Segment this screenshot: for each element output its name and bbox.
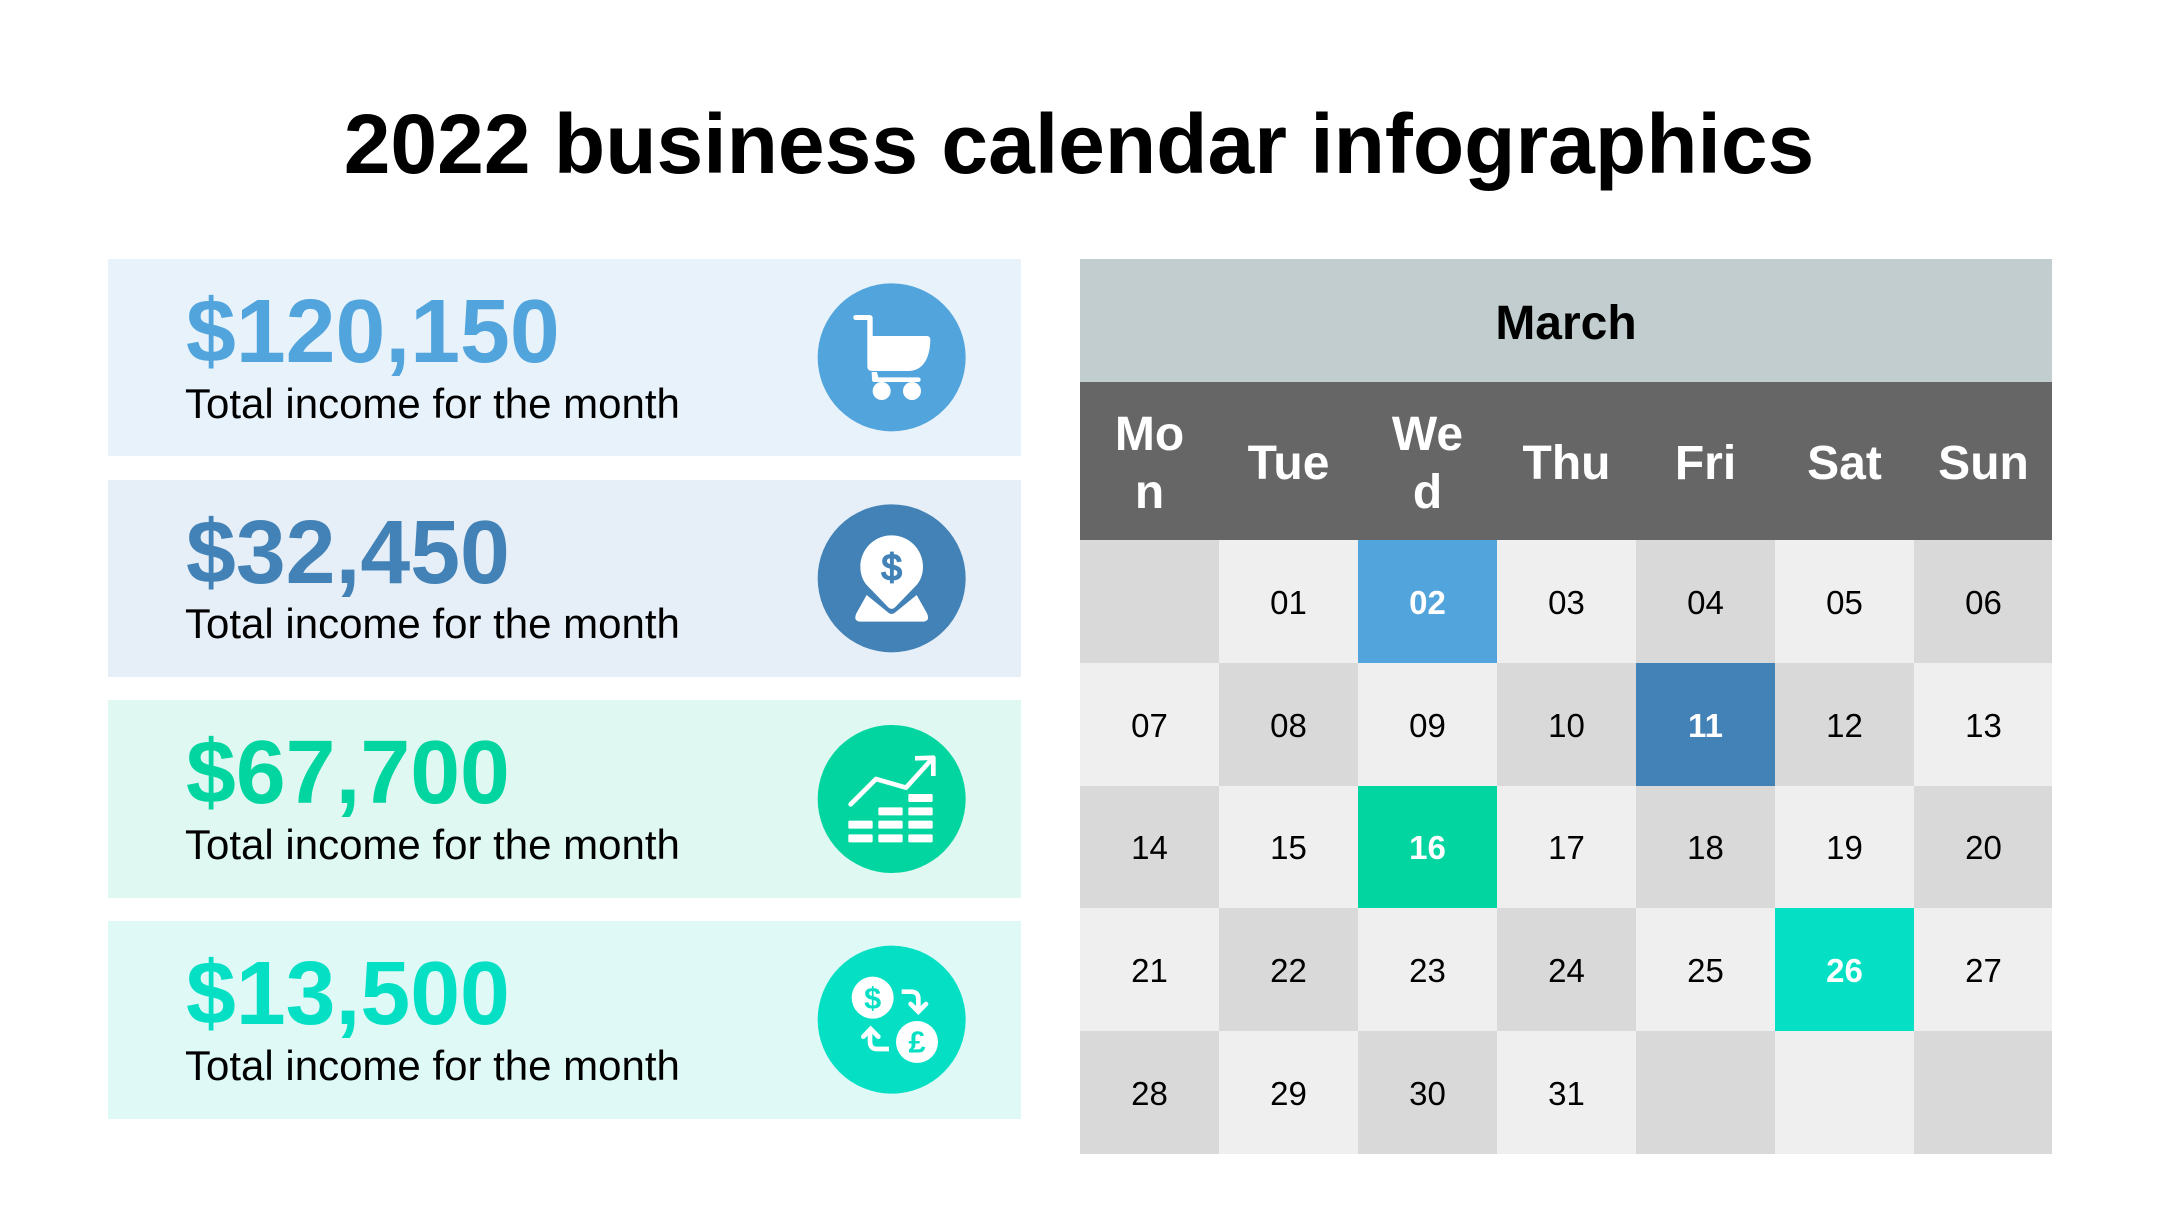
weekday header row: n xyxy=(1135,466,1164,518)
calendar day grid: 01 xyxy=(1270,584,1307,621)
calendar day grid: 26 xyxy=(1826,952,1863,989)
panel: income 4 xyxy=(108,921,1020,1118)
weekday header row: Sat xyxy=(1807,437,1882,490)
icon: currency exchange: £ xyxy=(908,1026,926,1060)
weekday header row: Mo xyxy=(1115,408,1184,461)
calendar day grid: 27 xyxy=(1965,952,2002,989)
weekday header row: d xyxy=(1413,466,1442,518)
calendar day grid: 04 xyxy=(1687,584,1724,621)
calendar day grid xyxy=(1080,540,2052,1154)
calendar day grid: 22 xyxy=(1270,952,1307,989)
label: income 1: Total income for the month xyxy=(185,380,680,427)
icon: currency exchange: $ xyxy=(864,981,881,1015)
calendar day grid: 05 xyxy=(1826,584,1863,621)
weekday header row: Tue xyxy=(1248,437,1329,490)
calendar day grid: 16 xyxy=(1409,829,1446,866)
amount: $120,150: $120,150 xyxy=(186,281,560,381)
icon: growth chart xyxy=(818,725,966,873)
label: income 2: Total income for the month xyxy=(185,600,680,647)
icon: location pin with dollar: $ xyxy=(881,547,902,588)
calendar day grid: 11 xyxy=(1688,707,1723,744)
calendar day grid: 13 xyxy=(1965,707,2002,744)
weekday header row: We xyxy=(1392,408,1463,461)
amount: $32,450: $32,450 xyxy=(186,502,510,602)
calendar day grid: 31 xyxy=(1548,1075,1585,1112)
weekday header row: Fri xyxy=(1675,437,1736,490)
calendar day grid: 21 xyxy=(1131,952,1168,989)
calendar day grid: 24 xyxy=(1548,952,1585,989)
amount: $13,500: $13,500 xyxy=(186,943,510,1043)
calendar day grid: 20 xyxy=(1965,829,2002,866)
label: income 4: Total income for the month xyxy=(185,1042,680,1089)
calendar day grid: 03 xyxy=(1548,584,1585,621)
calendar xyxy=(1080,259,2052,1154)
calendar day grid: 28 xyxy=(1131,1075,1168,1112)
calendar day grid: 15 xyxy=(1270,829,1307,866)
calendar day grid: 12 xyxy=(1826,707,1863,744)
calendar day grid: 23 xyxy=(1409,952,1446,989)
title: 2022 business calendar infographics xyxy=(344,97,1814,191)
calendar day grid: 08 xyxy=(1270,707,1307,744)
calendar day grid: 17 xyxy=(1548,829,1585,866)
weekday header row: Sun xyxy=(1938,437,2029,490)
calendar day grid: 09 xyxy=(1409,707,1446,744)
calendar day grid: 10 xyxy=(1548,707,1585,744)
weekday header row xyxy=(1080,382,2053,540)
panel: income 3 xyxy=(108,700,1020,898)
panel: income 1 xyxy=(108,259,1020,456)
icon: currency exchange xyxy=(818,946,966,1094)
calendar month header xyxy=(1080,259,2052,382)
icon: location pin with dollar xyxy=(818,504,966,652)
weekday header row: Thu xyxy=(1523,437,1610,490)
label: income 3: Total income for the month xyxy=(185,821,680,868)
calendar day grid: 07 xyxy=(1131,707,1168,744)
calendar day grid: 29 xyxy=(1270,1075,1307,1112)
icon: shopping cart xyxy=(818,283,966,432)
calendar day grid: 19 xyxy=(1826,829,1863,866)
calendar day grid: 06 xyxy=(1965,584,2002,621)
calendar day grid: 02 xyxy=(1409,584,1446,621)
calendar day grid: 14 xyxy=(1131,829,1168,866)
panel: income 2 xyxy=(108,480,1020,677)
calendar day grid: 30 xyxy=(1409,1075,1446,1112)
calendar month header: March xyxy=(1495,297,1637,350)
amount: $67,700: $67,700 xyxy=(186,722,510,822)
calendar day grid: 25 xyxy=(1687,952,1724,989)
calendar day grid: 18 xyxy=(1687,829,1724,866)
